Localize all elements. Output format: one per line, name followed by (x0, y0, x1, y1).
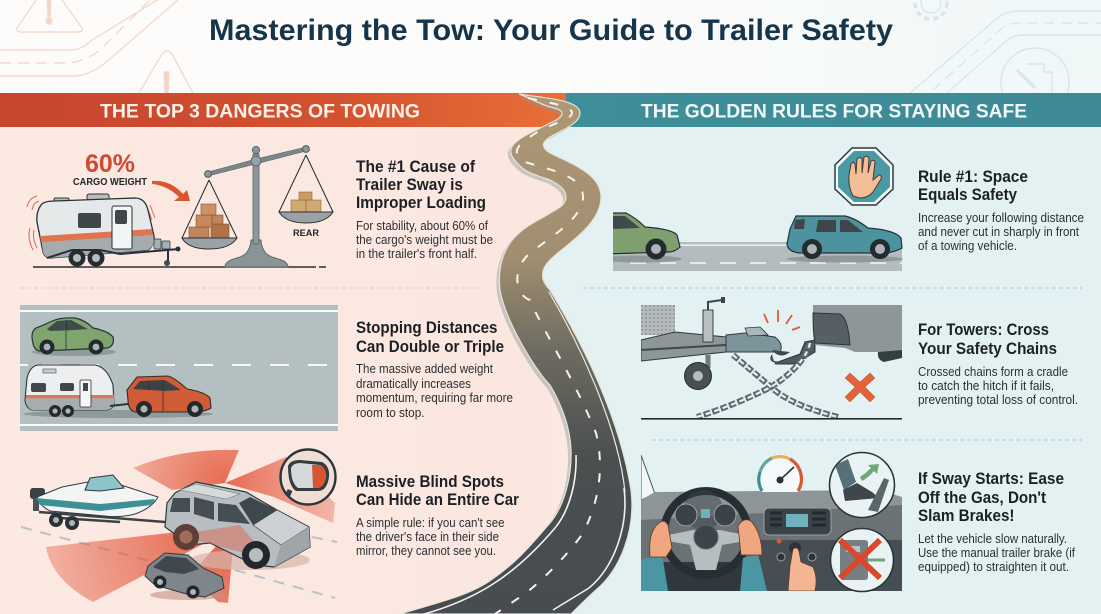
arrow: cargo to scale (152, 181, 190, 201)
text: blind spots: Can Hide an Entire Car (356, 491, 520, 509)
decorative background outlines: warning signs and roads (0, 0, 193, 93)
text: improper loading: in the trailer's front half. (356, 247, 477, 261)
text: rule 2: Crossed chains form a cradle (918, 365, 1068, 379)
icon: travel trailer (27, 194, 180, 266)
text: rule 2: preventing total loss of control. (918, 393, 1078, 407)
right pan with light cargo: REAR (293, 228, 319, 239)
header band: dangers (0, 93, 566, 127)
silver SUV (165, 482, 310, 570)
left pan with heavy cargo (182, 180, 237, 249)
title: Mastering the Tow: Your Guide to Trailer Safety (209, 14, 893, 47)
callout: 60% cargo weight: 60% (85, 150, 135, 178)
header band: golden rules (566, 93, 1101, 127)
header band: dangers: THE TOP 3 DANGERS OF TOWING (100, 100, 420, 122)
icon: red X (845, 373, 875, 402)
text: rule 3: Let the vehicle slow naturally. (918, 532, 1067, 546)
road strip (613, 242, 902, 271)
icon: speedometer (757, 455, 803, 492)
text: improper loading: The #1 Cause of (356, 158, 475, 176)
right pan with light cargo (279, 155, 333, 239)
text: blind spots: mirror, they cannot see you. (356, 544, 496, 558)
ground line (641, 418, 902, 420)
green sedan (32, 318, 116, 356)
icon: trailer brake crossed out (830, 528, 894, 592)
text: rule 2 (918, 321, 1078, 407)
text: improper loading (356, 158, 493, 261)
text: rule 3: Off the Gas, Don't (918, 489, 1046, 507)
panel: danger 2 stopping distance (20, 305, 513, 431)
text: blind spots (356, 473, 520, 558)
blind spot zones (46, 450, 335, 603)
text: stopping distances: Stopping Distances (356, 319, 498, 337)
text: rule 1: Equals Safety (918, 186, 1018, 204)
text: blind spots: A simple rule: if you can't see (356, 516, 505, 530)
text: rule 3: If Sway Starts: Ease (918, 470, 1064, 488)
grey sedan in blind spot (145, 553, 226, 600)
icon: foot easing off pedal (830, 452, 894, 518)
lane dashes (21, 527, 337, 598)
icon: side mirror (280, 450, 336, 510)
boat on trailer (30, 475, 165, 530)
text: improper loading: Trailer Sway is (356, 176, 463, 194)
text: blind spots: Massive Blind Spots (356, 473, 504, 491)
decorative background outlines: gear, road and gauge (910, 0, 1101, 116)
text: rule 3: equipped) to straighten it out. (918, 560, 1069, 574)
text: stopping distances: Can Double or Triple (356, 338, 504, 356)
panel: rule 3 sway response (641, 452, 1075, 600)
winding road divider (397, 94, 632, 614)
text: stopping distances (356, 319, 513, 420)
text: rule 3 (918, 470, 1075, 574)
text: rule 3: Use the manual trailer brake (if (918, 546, 1075, 560)
callout: 60% cargo weight (73, 150, 147, 188)
text: stopping distances: room to stop. (356, 406, 424, 420)
text: blind spots: the driver's face in their side (356, 530, 499, 544)
trailer towed by red SUV (23, 365, 213, 418)
text: rule 2: Your Safety Chains (918, 340, 1057, 358)
panel: rule 1 space equals safety (598, 148, 1084, 271)
text: rule 1: Increase your following distance (918, 211, 1084, 225)
header band: golden rules: THE GOLDEN RULES FOR STAYING SAFE (641, 100, 1027, 122)
icon: stop hand sign (835, 148, 893, 205)
text: improper loading: For stability, about 60% of (356, 219, 488, 233)
text: rule 3: Slam Brakes! (918, 507, 1014, 525)
text: rule 1: of a towing vehicle. (918, 239, 1017, 253)
road scene (20, 305, 338, 431)
panel: rule 2 cross safety chains (641, 296, 1078, 420)
hitch illustration (641, 296, 902, 390)
balance scale (33, 146, 326, 267)
teal SUV (787, 216, 903, 262)
crossed safety chains (697, 343, 838, 417)
dashboard illustration (641, 455, 902, 600)
text: rule 2: For Towers: Cross (918, 321, 1049, 339)
text: rule 1: Rule #1: Space (918, 168, 1028, 186)
green car cut off at the left (613, 212, 682, 262)
text: stopping distances: The massive added weight (356, 362, 493, 376)
text: rule 2: to catch the hitch if it fails, (918, 379, 1054, 393)
text: stopping distances: dramatically increases (356, 377, 471, 391)
panel: danger 3 blind spots (21, 450, 520, 603)
panel: danger 1 improper loading (27, 146, 493, 267)
text: improper loading: the cargo's weight must be (356, 233, 493, 247)
callout: 60% cargo weight: CARGO WEIGHT (73, 177, 147, 188)
text: improper loading: Improper Loading (356, 194, 486, 212)
text: stopping distances: momentum, requiring far more (356, 391, 513, 405)
text: rule 1 (918, 168, 1084, 253)
text: rule 1: and never cut in sharply in front (918, 225, 1079, 239)
